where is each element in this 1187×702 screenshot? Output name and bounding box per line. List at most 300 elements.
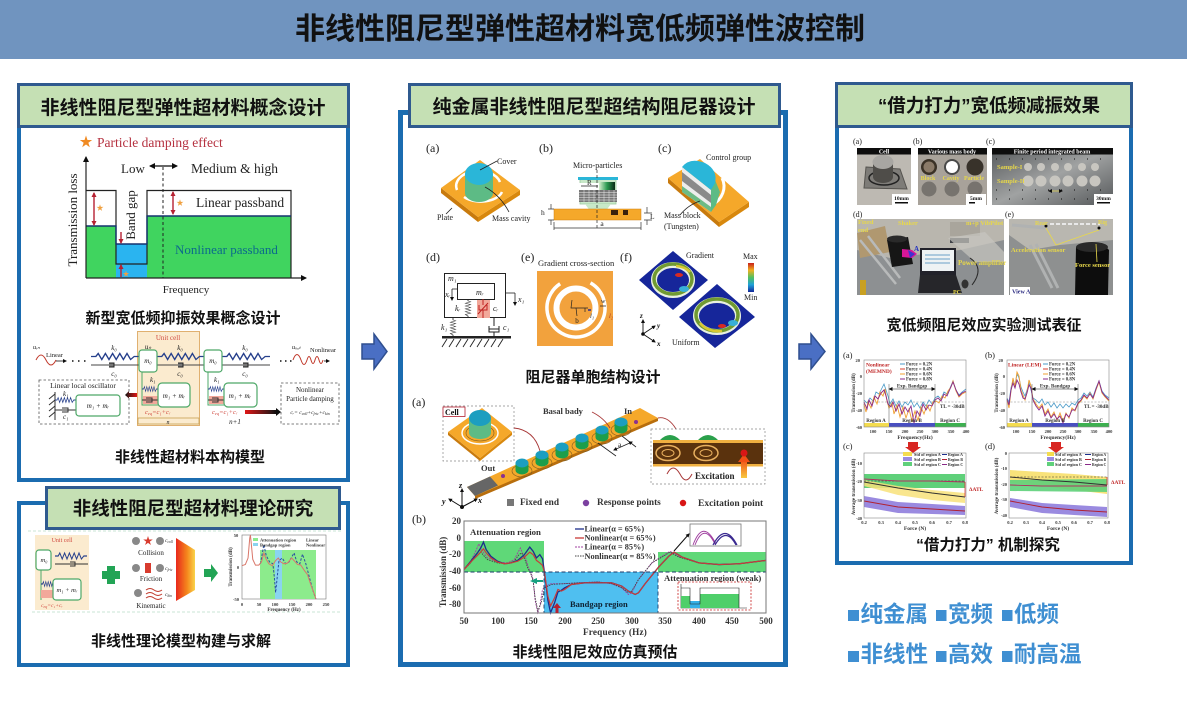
chart: average transmission (d): 0 — [1005, 451, 1008, 456]
chart: simulated transmission: -60 — [449, 583, 461, 593]
figure: section (b): Micro-particles — [573, 161, 622, 170]
photo: test setup (d): (d) — [853, 210, 863, 219]
chart: simulated transmission: 200 — [558, 616, 572, 626]
chart: simulated transmission: Linear(α = 85%) — [584, 542, 644, 552]
chart: linear transmission (b): 350 — [1091, 429, 1098, 434]
diagram: constitutive model: n — [166, 420, 170, 426]
figure: mechanical model (d): cᵣ — [493, 304, 499, 313]
chart: average transmission (d): -30 — [1001, 497, 1008, 502]
figure: beam model: In — [624, 406, 632, 416]
chart: average transmission (d): 0.8 — [1104, 520, 1111, 525]
arrow: centre to right — [799, 334, 825, 369]
chart: linear transmission (b): Force = 0.4N — [1049, 368, 1076, 372]
damping mechanisms: c — [165, 566, 167, 572]
chart: transmission: 0 — [237, 565, 240, 570]
figure: mechanical model (d): xᵣ — [444, 290, 451, 299]
diagram: constitutive model: =c₁+cᵣ — [219, 409, 238, 416]
chart: simulated transmission: 100 — [491, 616, 505, 626]
figure: section (b): h — [541, 208, 545, 217]
photo: integrated beam (c): 30mm — [1096, 196, 1111, 202]
chart: average transmission (c): -10 — [856, 461, 863, 466]
diagram: constitutive model: k₁ — [150, 376, 156, 384]
chart: average transmission (c) — [843, 441, 984, 532]
chart: transmission loss concept: Frequency — [163, 284, 210, 296]
chart: simulated transmission: 20 — [452, 516, 462, 526]
photo: test setup (d) — [853, 210, 1006, 296]
figure: modal shapes (f): Uniform — [672, 338, 700, 347]
diagram: constitutive model: k₁ — [214, 376, 220, 384]
figure: mechanical model (d): k₁ — [441, 323, 448, 332]
figure: beam model: x — [477, 496, 482, 505]
chart: nonlinear transmission (a): 300 — [932, 429, 939, 434]
diagram: constitutive model: c₁ — [63, 413, 69, 421]
chart: transmission loss concept: Low — [121, 161, 145, 176]
chart: average transmission (c): 0.8 — [962, 520, 969, 525]
chart: average transmission (d): Force (N) — [1047, 525, 1069, 532]
panel heading: concept design — [18, 84, 348, 126]
chart: average transmission (d): 0.7 — [1087, 520, 1094, 525]
unit cell inset: m₀ — [41, 557, 47, 564]
figure: section (b) — [539, 141, 655, 230]
photo: cell (a): 10mm — [894, 196, 909, 202]
photo: mass bodies (b) — [913, 137, 987, 205]
chart: simulated transmission: 150 — [524, 616, 538, 626]
unit cell inset: eq — [43, 604, 47, 609]
figure: modal shapes (f): Min — [744, 293, 757, 302]
arrow: green — [204, 564, 218, 582]
panel heading: theory — [46, 488, 340, 528]
unit cell inset: c — [41, 603, 43, 609]
diagram: constitutive model: m₀ — [209, 357, 217, 365]
chart: transmission: Attenuation region — [260, 538, 297, 542]
chart: simulated transmission: Bandgap region — [570, 599, 628, 609]
diagram: constitutive model: =c₁+cᵣ — [152, 409, 171, 416]
figure: mechanical model (d) — [426, 250, 525, 347]
photo: sensors (e): Rig — [1098, 220, 1107, 226]
damping mechanisms — [132, 536, 173, 610]
chart: simulated transmission — [412, 512, 773, 637]
diagram: constitutive model: eq — [148, 411, 153, 416]
chart: simulated transmission: 300 — [625, 616, 639, 626]
chart: transmission: 150 — [289, 602, 296, 607]
chart: linear transmission (b): -60 — [999, 425, 1006, 430]
diagram: constitutive model: k₀ — [177, 344, 183, 352]
chart: average transmission (d): -20 — [1001, 482, 1008, 487]
diagram: constitutive model: uₒᵤₜ — [292, 344, 301, 351]
chart: average transmission (d): 0.6 — [1071, 520, 1078, 525]
photo: test setup (d): PC — [953, 290, 961, 296]
chart: nonlinear transmission (a): Region A — [866, 419, 886, 424]
chart: simulated transmission: Nonlinear(α = 85%) — [584, 552, 656, 561]
keyword row 1 — [848, 601, 1059, 627]
chart: nonlinear transmission (a): Region C — [940, 419, 960, 424]
photo: test setup (d): m+p VibPilot — [966, 220, 1004, 227]
damping mechanisms: Kinematic — [136, 602, 166, 610]
chart: linear transmission (b): 20 — [998, 358, 1004, 363]
diagram: constitutive model: uₙ — [145, 343, 151, 351]
diagram: constitutive model: Nonlinear — [310, 347, 337, 354]
photo: mass bodies (b): Various mass body — [928, 150, 976, 156]
figure: beam model — [412, 395, 765, 509]
chart: nonlinear transmission (a): 350 — [948, 429, 955, 434]
chart: transmission: Transmission (dB) — [229, 547, 234, 587]
chart: average transmission (d): Region B — [1092, 458, 1107, 462]
chart: average transmission (c): Force (N) — [904, 525, 926, 532]
panel heading: effect: “借力打力”宽低频减振效果 — [878, 95, 1100, 116]
caption: unit cell design: 阻尼器单胞结构设计 — [525, 368, 661, 386]
diagram: constitutive model: k₁ — [63, 390, 69, 398]
diagram: constitutive model: m₁ + mᵣ — [229, 392, 252, 400]
photo: test setup (d): Fixed — [858, 219, 874, 226]
chart: simulated transmission: 500 — [759, 616, 773, 626]
photo: sensors (e): Rear — [1035, 221, 1048, 227]
figure: beam model: Out — [481, 463, 495, 473]
damping mechanisms: Collision — [138, 549, 164, 557]
caption: constitutive model: 非线性超材料本构模型 — [115, 448, 265, 466]
panel: theory research — [19, 488, 348, 665]
photo: test setup (d): Power amplifier — [958, 259, 1006, 267]
chart: transmission: Bandgap region — [260, 542, 291, 548]
keyword row 1: 宽频 — [948, 601, 993, 627]
caption: experiment: 宽低频阻尼效应实验测试表征 — [886, 316, 1082, 334]
photo: mass bodies (b): Block — [921, 176, 936, 182]
photo: cell (a) — [853, 137, 911, 205]
figure: beam model: (a) — [412, 395, 425, 409]
chart: transmission: 50 — [257, 602, 262, 607]
chart: average transmission (c): Region C — [948, 463, 963, 467]
chart: nonlinear transmission (a): 20 — [856, 358, 861, 363]
panel heading: effect — [836, 84, 1132, 126]
photo: integrated beam (c): Sample-I — [997, 164, 1023, 171]
panel: damper design — [400, 84, 786, 664]
chart: linear transmission (b): Frequency(Hz) — [1040, 434, 1076, 441]
chart: nonlinear transmission (a): Force = 0.2N — [906, 362, 933, 368]
chart: average transmission (d): 0.3 — [1023, 520, 1030, 525]
chart: linear transmission (b): Exp. Bandgap — [1040, 384, 1070, 390]
chart: average transmission (c): Std of region C — [914, 462, 941, 467]
chart: nonlinear transmission (a): Force = 0.8N — [906, 378, 933, 382]
chart: linear transmission (b): Transmission (dB) — [995, 373, 1000, 413]
diagram: constitutive model: +c — [307, 410, 314, 416]
figure: control group (c): (Tungsten) — [664, 222, 699, 231]
chart: transmission loss concept: Medium & high — [191, 161, 278, 176]
figure: unit cell (a): Cover — [497, 157, 517, 166]
chart: transmission — [229, 533, 330, 613]
chart: linear transmission (b): Region B — [1045, 419, 1065, 424]
title banner: 非线性阻尼型弹性超材料宽低频弹性波控制 — [295, 13, 865, 46]
photo: sensors (e): Force sensor — [1075, 262, 1110, 269]
figure: unit cell (a): Plate — [437, 213, 453, 222]
keyword row 2: 高效 — [948, 642, 993, 667]
diagram: constitutive model: m₀ — [144, 357, 152, 365]
chart: linear transmission (b): 0 — [1003, 374, 1006, 379]
chart: average transmission (d) — [985, 441, 1126, 532]
chart: average transmission (c): ΔATL — [969, 487, 984, 493]
chart: nonlinear transmission (a): 0 — [860, 374, 863, 379]
photo: integrated beam (c): Finite period integrated beam — [1014, 150, 1090, 156]
chart: average transmission (d): -40 — [1001, 513, 1008, 518]
chart: average transmission (d): Std of region B — [1055, 457, 1082, 462]
photo: mass bodies (b): Particle — [964, 176, 984, 182]
figure: modal shapes (f): z — [639, 312, 643, 320]
photo: sensors (e): (e) — [1005, 210, 1014, 219]
photo: mass bodies (b): Cavity — [942, 176, 960, 182]
figure: mechanical model (d): (d) — [426, 250, 440, 264]
figure: theoretical model — [28, 531, 342, 613]
chart: transmission loss concept: Band gap — [123, 190, 138, 240]
chart: transmission: 0 — [241, 602, 244, 607]
chart: nonlinear transmission (a): 250 — [917, 429, 924, 434]
chart: linear transmission (b): -40 — [999, 408, 1006, 413]
figure: beam model: z — [458, 481, 463, 490]
figure: beam model: a — [618, 440, 622, 449]
chart: simulated transmission: 250 — [591, 616, 605, 626]
chart: simulated transmission: -40 — [449, 566, 461, 576]
figure: control group (c) — [658, 141, 751, 231]
chart: average transmission (d): Std of region C — [1055, 462, 1082, 467]
diagram: constitutive model: n+1 — [229, 418, 241, 426]
photo: mass bodies (b): 5mm — [970, 196, 982, 202]
title banner — [0, 0, 1187, 59]
chart: transmission: 250 — [323, 602, 330, 607]
damping mechanisms: coll — [167, 540, 173, 544]
caption: mechanism: “借力打力” 机制探究 — [916, 535, 1060, 554]
chart: average transmission (c): (c) — [843, 441, 853, 451]
unit cell inset: =c₁+cᵣ — [47, 603, 63, 609]
photo: sensors (e): Acceleration sensor — [1011, 247, 1065, 254]
chart: linear transmission (b): Force = 0.6N — [1049, 372, 1076, 378]
chart: linear transmission (b): Region C — [1083, 419, 1103, 424]
chart: linear transmission (b) — [985, 350, 1113, 441]
diagram: constitutive model: coll — [302, 412, 307, 416]
chart: nonlinear transmission (a): Force = 0.6N — [906, 372, 933, 378]
keyword row 1: 纯金属 — [860, 601, 928, 627]
figure: cross-section (e) — [521, 250, 616, 348]
diagram: constitutive model: c — [145, 409, 148, 416]
chart: nonlinear transmission (a): Exp. Bandgap — [897, 384, 927, 390]
chart: simulated transmission: Nonlinear(α = 65%) — [584, 534, 656, 542]
diagram: constitutive model: c — [212, 409, 215, 416]
chart: transmission: 100 — [272, 602, 279, 607]
icon: green plus — [102, 566, 120, 584]
panel heading: damper design — [410, 84, 780, 126]
figure: mechanical model (d): c₁ — [503, 323, 510, 332]
figure: beam model: Cell — [445, 408, 460, 417]
keywords — [848, 601, 1082, 667]
diagram: constitutive model: kin — [325, 412, 330, 416]
figure: beam model: Excitation — [695, 471, 734, 481]
chart: transmission loss concept: Transmission loss — [65, 173, 80, 267]
chart: average transmission (c): Std of region B — [914, 457, 941, 462]
photo: integrated beam (c): (c) — [986, 137, 995, 146]
figure: section (b): a — [600, 219, 604, 228]
diagram: constitutive model: c₀ — [177, 370, 183, 378]
figure: mechanical model (d): mᵣ — [476, 288, 484, 297]
chart: nonlinear transmission (a): (a) — [843, 350, 853, 360]
chart: average transmission (d): (d) — [985, 441, 995, 451]
chart: nonlinear transmission (a): Force = 0.4N — [906, 368, 933, 372]
damping mechanisms: fric — [167, 568, 173, 572]
chart: nonlinear transmission (a): Frequency(Hz) — [897, 434, 933, 441]
chart: nonlinear transmission (a): 100 — [870, 429, 877, 434]
keyword row 2 — [848, 642, 1082, 667]
chart: transmission: 50 — [234, 533, 239, 538]
chart: transmission loss concept — [65, 135, 306, 296]
chart: simulated transmission: 400 — [692, 616, 706, 626]
damping mechanisms: kin — [167, 594, 172, 598]
chart: average transmission (c): 0.7 — [946, 520, 953, 525]
chart: linear transmission (b): 100 — [1013, 429, 1020, 434]
chart: average transmission (c): Average transmission (dB) — [852, 458, 857, 515]
figure: beam model: Basal bady — [543, 406, 584, 416]
chart: transmission: 200 — [306, 602, 313, 607]
chart: simulated transmission: 350 — [658, 616, 672, 626]
diagram: constitutive model: k₀ — [242, 344, 248, 352]
figure: modal shapes (f): Max — [743, 252, 758, 261]
keyword row 1: 低频 — [1014, 602, 1059, 627]
diagram: constitutive model: m₁ + mᵣ — [87, 402, 110, 410]
figure: modal shapes (f): (f) — [620, 250, 632, 264]
chart: transmission: Nonlinear — [306, 542, 325, 548]
chart: transmission: Linear — [306, 538, 319, 542]
chart: linear transmission (b): -20 — [999, 391, 1006, 396]
diagram: constitutive model: Nonlinear — [296, 386, 325, 394]
chart: simulated transmission: Attenuation region (weak) — [664, 573, 761, 583]
chart: linear transmission (b): 150 — [1029, 429, 1036, 434]
chart: transmission: -50 — [233, 597, 240, 602]
figure: unit cell (a) — [426, 141, 530, 223]
chart: linear transmission (b): Region A — [1009, 419, 1029, 424]
figure: mechanical model (d): x₁ — [517, 295, 525, 304]
chart: average transmission (c): 0.5 — [912, 520, 919, 525]
chart: average transmission (c): Region B — [948, 458, 963, 462]
chart: average transmission (d): 0.2 — [1007, 520, 1014, 525]
figure: modal shapes (f): Gradient — [686, 251, 715, 260]
chart: transmission loss concept: Particle damping effect — [97, 135, 223, 150]
figure: mechanical model (d): m₁ — [448, 274, 457, 283]
diagram: constitutive model: c₀ — [111, 370, 117, 378]
chart: linear transmission (b): (b) — [985, 350, 995, 360]
damping mechanisms: Friction — [140, 575, 163, 583]
chart: linear transmission (b): 200 — [1045, 429, 1052, 434]
chart: simulated transmission: Linear(α = 65%) — [584, 524, 644, 534]
diagram: constitutive model: c₀ — [242, 370, 248, 378]
chart: linear transmission (b): Force = 0.2N — [1049, 362, 1076, 368]
chart: average transmission (d): Region C — [1092, 463, 1107, 467]
chart: linear transmission (b): 300 — [1075, 429, 1082, 434]
chart: nonlinear transmission (a): 200 — [902, 429, 909, 434]
chart: simulated transmission: 450 — [725, 616, 739, 626]
unit cell inset — [35, 535, 89, 610]
photo: sensors (e) — [1005, 210, 1113, 296]
figure: cross-section (e): (e) — [521, 250, 534, 264]
chart: nonlinear transmission (a): -60 — [856, 425, 863, 430]
chart: simulated transmission: Frequency (Hz) — [583, 627, 647, 637]
chart: average transmission (c): Region A — [948, 453, 963, 457]
chart: linear transmission (b): Linear (LEM) — [1008, 362, 1042, 368]
chart: nonlinear transmission (a): Transmission (dB) — [852, 373, 857, 413]
figure: modal shapes (f): y — [656, 322, 661, 330]
chart: average transmission (c): -40 — [856, 516, 863, 521]
diagram: constitutive model: +c — [319, 410, 326, 416]
figure: beam model: Excitation point — [698, 499, 764, 509]
diagram: constitutive model: k₀ — [111, 344, 117, 352]
chart: nonlinear transmission (a): Region B — [902, 419, 922, 424]
damping mechanisms: c — [165, 538, 167, 544]
chart: simulated transmission: 0 — [456, 533, 462, 543]
photo: test setup (d): Shaker — [898, 220, 918, 227]
chart: nonlinear transmission (a) — [843, 350, 970, 441]
figure: unit cell (a): Mass cavity — [492, 214, 530, 223]
figure: cross-section (e): w — [601, 298, 606, 305]
chart: average transmission (d): 0.5 — [1055, 520, 1062, 525]
diagram: constitutive model: Particle damping — [286, 395, 334, 403]
chart: average transmission (d): Region A — [1092, 453, 1106, 457]
photo: integrated beam (c) — [986, 137, 1113, 205]
chart: average transmission (c): -30 — [856, 498, 863, 503]
arrow: left to centre — [362, 334, 387, 369]
chart: average transmission (c): Std of region A — [914, 452, 941, 457]
keyword row 2: 耐高温 — [1014, 642, 1082, 667]
figure: cross-section (e): b — [575, 317, 579, 325]
figure: control group (c): Mass block — [664, 211, 701, 220]
figure: control group (c): (c) — [658, 141, 671, 155]
photo: sensors (e): View A — [1012, 290, 1031, 296]
figure: cross-section (e): l₁ — [590, 313, 594, 320]
chart: nonlinear transmission (a): 400 — [963, 429, 970, 434]
panel: concept design — [18, 84, 348, 480]
figure: beam model: Response points — [597, 498, 661, 508]
photo: cell (a): Cell — [879, 150, 889, 156]
chart: nonlinear transmission (a): TL = -30dB — [940, 405, 965, 410]
chart: nonlinear transmission (a): 150 — [886, 429, 893, 434]
chart: average transmission (d): ΔATL — [1111, 480, 1126, 486]
chart: transmission loss concept: Linear passband — [196, 195, 284, 210]
unit cell inset: m₁ + mᵣ — [57, 587, 78, 594]
chart: average transmission (d): -10 — [1001, 466, 1008, 471]
photo: test setup (d): A — [914, 245, 919, 253]
diagram: constitutive model: fric — [314, 412, 319, 416]
chart: simulated transmission: -80 — [449, 599, 461, 609]
panel heading: theory: 非线性阻尼型超材料理论研究 — [73, 498, 313, 519]
panel heading: damper design: 纯金属非线性阻尼型超结构阻尼器设计 — [432, 95, 756, 118]
figure: section (b): (b) — [539, 141, 553, 155]
panel: vibration reduction effect — [836, 84, 1132, 563]
figure: cross-section (e): l₂ — [609, 313, 614, 320]
chart: average transmission (d): Std of region A — [1055, 452, 1082, 457]
figure: cross-section (e): Gradient cross-section — [538, 258, 615, 268]
chart: simulated transmission: (b) — [412, 512, 426, 526]
chart: nonlinear transmission (a): (MEMND) — [866, 368, 892, 375]
chart: average transmission (c): 0.2 — [861, 520, 868, 525]
icon: gradient funnel — [176, 538, 195, 601]
chart: average transmission (d): Average transmission (dB) — [995, 457, 1000, 514]
chart: average transmission (d): 0.4 — [1039, 520, 1046, 525]
figure: section (b): L — [650, 212, 655, 221]
diagram: constitutive model: uᵢₙ — [33, 344, 40, 351]
chart: nonlinear transmission (a): Nonlinear — [866, 362, 890, 368]
caption: concept: 新型宽低频抑振效果概念设计 — [85, 309, 281, 327]
chart: average transmission (c): 0.3 — [878, 520, 885, 525]
damping mechanisms: c — [165, 592, 167, 598]
figure: control group (c): Control group — [706, 153, 751, 162]
diagram: constitutive model: Linear local oscillator — [50, 381, 116, 390]
photo: cell (a): (a) — [853, 137, 862, 146]
chart: simulated transmission: 50 — [460, 616, 469, 626]
figure: beam model: Fixed end — [520, 498, 560, 508]
caption: simulation: 非线性阻尼效应仿真预估 — [512, 643, 678, 661]
unit cell inset: Unit cell — [52, 538, 73, 544]
